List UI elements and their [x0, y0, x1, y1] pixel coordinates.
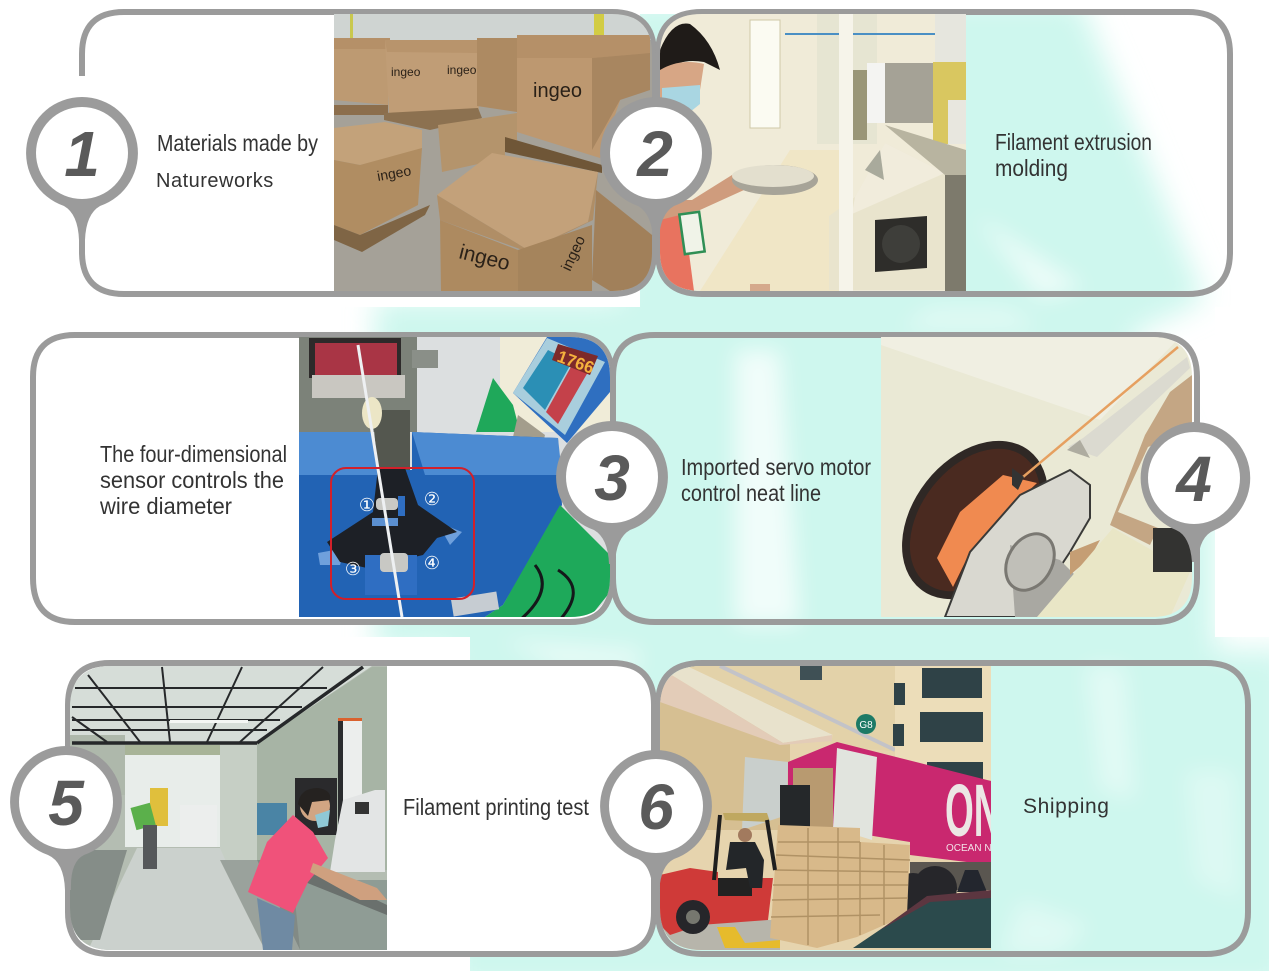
photo: truck loading: OCEAN NETWO — [946, 843, 1022, 854]
badge 3 — [556, 421, 668, 564]
badge 2 — [600, 97, 712, 240]
caption 2: molding — [995, 155, 1068, 181]
photo: ingeo cardboard boxes: ingeo — [533, 80, 582, 102]
badge 2: 2 — [636, 118, 673, 190]
caption 6: Shipping — [1023, 795, 1110, 818]
panel 4: servo motor — [613, 335, 1197, 628]
caption 3 — [99, 441, 287, 519]
photo: four-dimensional sensor: 1766 — [555, 347, 597, 378]
photo: ingeo cardboard boxes: ingeo — [376, 162, 412, 184]
caption 2 — [995, 129, 1152, 181]
badge 5: 5 — [48, 767, 85, 839]
badge 4: 4 — [1174, 443, 1212, 515]
photo: ingeo cardboard boxes: ingeo — [447, 63, 477, 77]
badge 1: 1 — [64, 118, 100, 190]
photo: ingeo cardboard boxes — [334, 14, 652, 291]
caption 5: Filament printing test — [403, 794, 590, 820]
caption 4: Imported servo motor — [681, 454, 871, 480]
caption 4: control neat line — [681, 480, 821, 506]
caption 4 — [681, 454, 871, 506]
panel 6: shipping — [658, 663, 1248, 954]
caption 2: Filament extrusion — [995, 129, 1152, 155]
badge 1 — [26, 97, 138, 240]
photo: four-dimensional sensor — [299, 337, 610, 625]
badge 4 — [1141, 422, 1250, 562]
photo: ingeo cardboard boxes: ingeo — [457, 241, 512, 275]
panel 2: extrusion — [658, 12, 1230, 294]
photo: ingeo cardboard boxes: ingeo — [391, 65, 421, 79]
photo: test lab — [70, 666, 387, 950]
photo: spool winding — [872, 337, 1192, 628]
caption 3: wire diameter — [99, 493, 232, 519]
panel 5: printing test — [68, 663, 654, 954]
caption 3: The four-dimensional — [100, 441, 287, 467]
badge 3: 3 — [594, 442, 630, 514]
caption 1: Natureworks — [156, 170, 274, 192]
panel 1: materials — [82, 12, 654, 294]
photo: four-dimensional sensor: ② — [424, 489, 440, 509]
photo: four-dimensional sensor: ① — [359, 495, 375, 515]
panel 3: sensor — [33, 335, 612, 625]
caption 1 — [156, 130, 318, 192]
mint background swaths — [375, 0, 1269, 971]
photo: four-dimensional sensor: ③ — [345, 559, 361, 579]
photo: extrusion line — [660, 14, 966, 291]
photo: four-dimensional sensor: ④ — [424, 553, 440, 573]
caption 1: Materials made by — [157, 130, 318, 156]
badge 5 — [10, 746, 122, 890]
photo: truck loading: G8 — [859, 720, 873, 731]
badge 6 — [600, 750, 712, 894]
photo: truck loading — [660, 665, 1022, 950]
caption 3: sensor controls the — [100, 467, 284, 493]
photo: ingeo cardboard boxes: ingeo — [558, 233, 589, 274]
photo: truck loading: ON — [945, 770, 1000, 852]
badge 6: 6 — [638, 771, 674, 843]
